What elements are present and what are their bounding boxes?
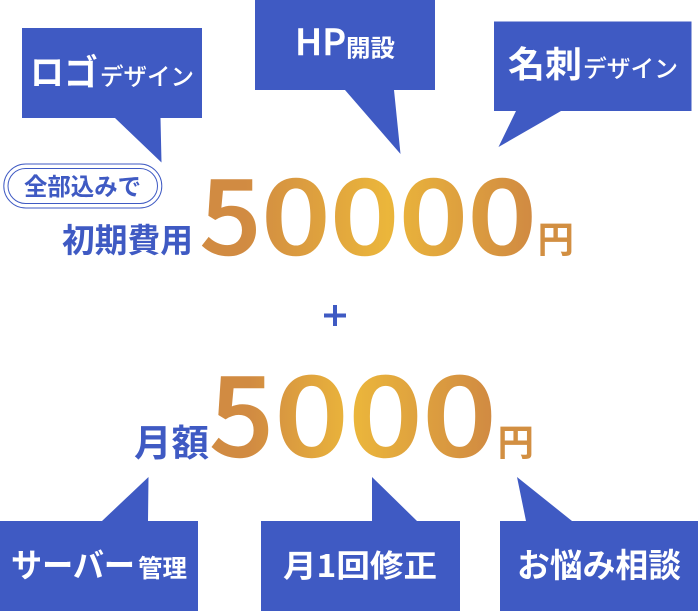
price: 50000: 5 — [200, 137, 261, 283]
speech bubble: server management — [0, 477, 198, 611]
price: 50000 — [200, 137, 536, 283]
speech bubble: business card design: デザイン — [583, 49, 678, 84]
speech bubble: website launch — [255, 0, 435, 154]
speech bubble: website launch: HP — [295, 14, 346, 66]
price: 5000 — [210, 331, 496, 487]
badge: all inclusive — [4, 164, 162, 208]
speech bubble: logo design — [22, 28, 202, 162]
speech bubble: server management: 管理 — [138, 550, 187, 585]
speech bubble: business card design — [494, 22, 692, 147]
speech bubble: logo design: デザイン — [100, 57, 194, 92]
speech bubble: website launch: 開設 — [346, 28, 395, 64]
badge: all inclusive: 全部込みで — [24, 167, 141, 202]
label: monthly fee: 月額 — [134, 413, 209, 467]
price: 50000: 0000 — [262, 137, 536, 283]
speech bubble: consultation — [500, 477, 698, 611]
unit: yen, initial: 円 — [538, 210, 574, 264]
speech bubble: server management: サーバー — [11, 539, 135, 587]
speech bubble: business card design: 名刺 — [508, 36, 582, 88]
label: initial cost: 初期費用 — [62, 214, 193, 262]
speech bubble: logo design: ロゴ — [30, 44, 98, 96]
price: 5000: 5 — [210, 331, 274, 487]
speech bubble: monthly revision: 月1回修正 — [283, 541, 437, 586]
plus sign — [324, 305, 346, 326]
speech bubble: monthly revision — [261, 477, 460, 611]
price: 5000: 000 — [274, 331, 496, 487]
unit: yen, monthly: 円 — [498, 414, 534, 466]
speech bubble: consultation: お悩み相談 — [517, 539, 681, 587]
